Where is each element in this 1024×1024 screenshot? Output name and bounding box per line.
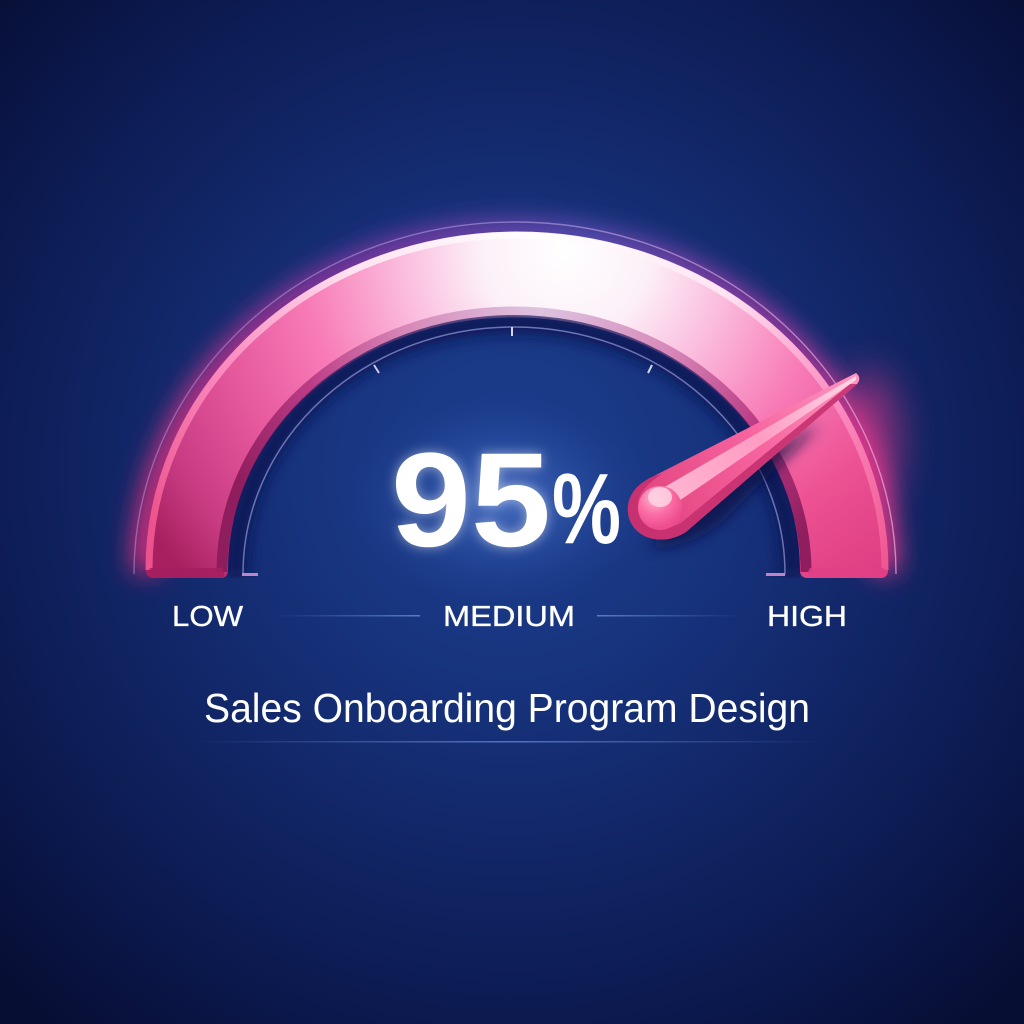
needle shadow: [650, 425, 820, 548]
gauge: [134, 222, 900, 582]
percentage value: %: [552, 453, 621, 565]
band shadow: [150, 578, 880, 586]
hub highlight: [648, 487, 672, 507]
percentage value: 95: [391, 426, 551, 575]
tick: left: [374, 365, 379, 373]
outer highlight rim: [149, 235, 885, 570]
inner shadow: [236, 323, 792, 578]
needle body: [628, 373, 859, 540]
line: medium to high: [597, 615, 745, 616]
right side tint: [790, 456, 888, 578]
title underline: [195, 741, 825, 742]
label: low: LOW: [172, 601, 244, 633]
band foot: high: [808, 568, 886, 578]
inner thin arc: [243, 327, 785, 574]
percentage value: 95: [391, 426, 551, 575]
band foot: low: [149, 568, 224, 578]
percentage value: [345, 395, 655, 605]
needle lower edge: [628, 384, 857, 540]
scale labels: [172, 601, 847, 633]
needle: [628, 373, 859, 548]
tick: top: [511, 327, 513, 336]
line: low to medium: [272, 615, 420, 616]
title: Sales Onboarding Program Design: [204, 685, 810, 731]
needle highlight: [656, 376, 856, 506]
gauge outer glow: [146, 234, 898, 572]
outer thin arc: [134, 222, 896, 574]
gauge band: [146, 232, 900, 582]
end tick: high: [766, 573, 785, 576]
band body: [146, 232, 888, 578]
label: medium: MEDIUM: [443, 601, 575, 633]
end tick: low: [242, 573, 258, 576]
value glow: [345, 395, 655, 605]
needle hub: [638, 486, 682, 530]
tick: right: [648, 365, 652, 373]
inner dark rim: [222, 312, 806, 572]
label: high: HIGH: [767, 601, 847, 633]
